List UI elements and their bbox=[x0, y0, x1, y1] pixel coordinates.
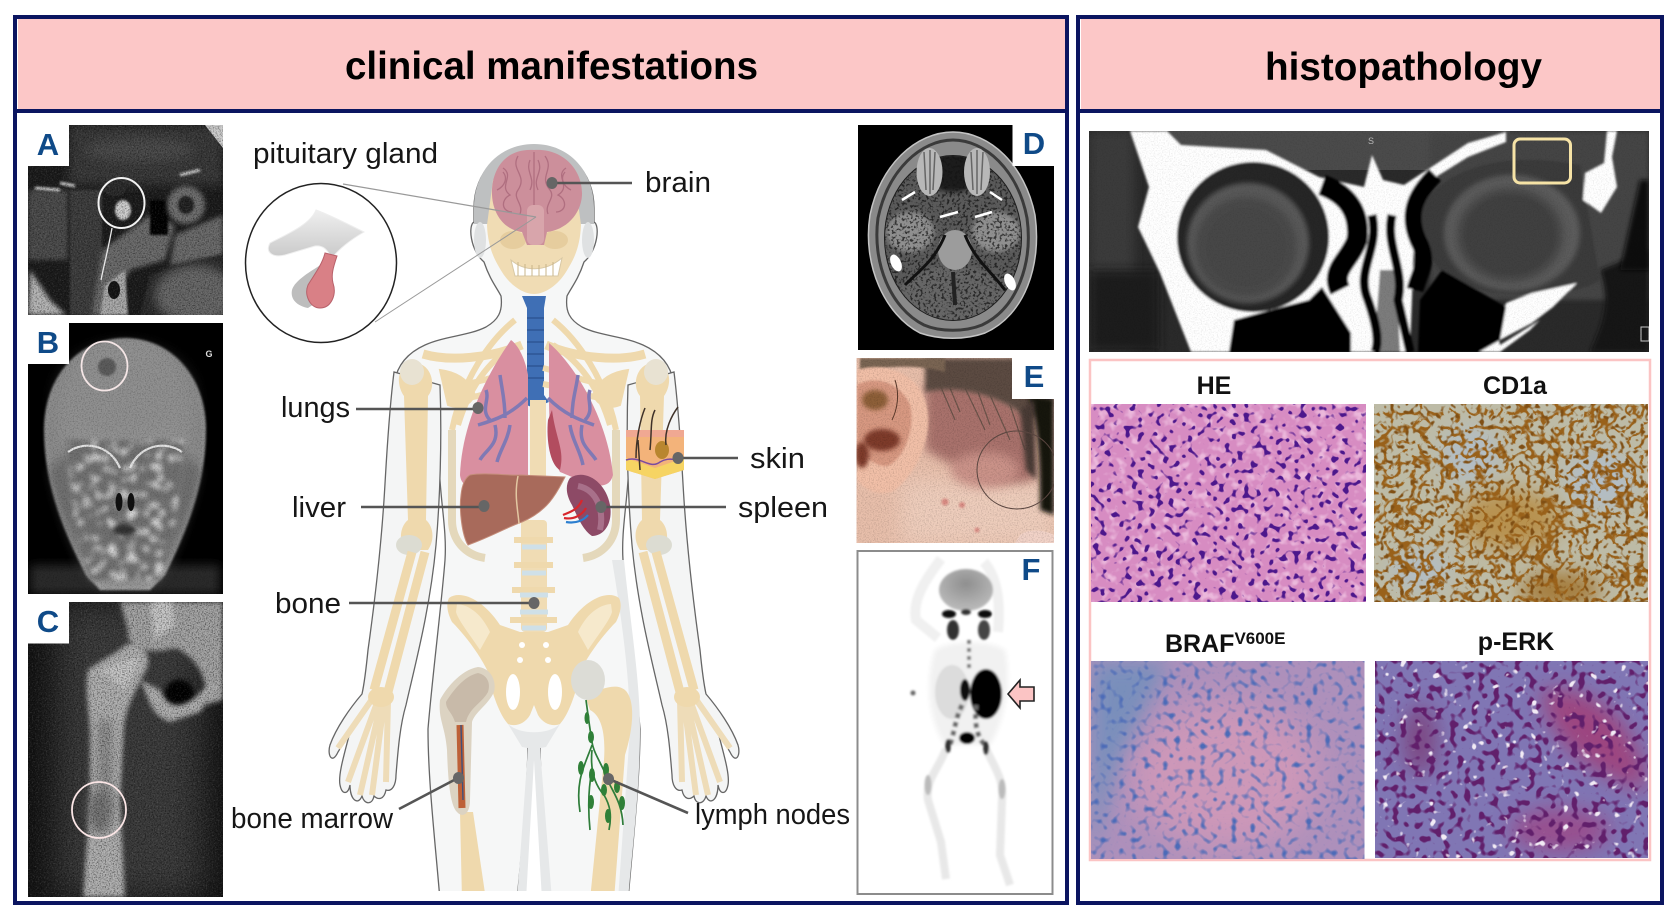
label: lungs: lungs bbox=[281, 392, 350, 424]
lesion box bbox=[1514, 139, 1570, 183]
bone: right femur bbox=[571, 660, 632, 900]
micrograph: HE bbox=[1091, 404, 1366, 602]
panel: histology stains bbox=[1090, 360, 1650, 860]
organ: lymph nodes and vessels bbox=[578, 700, 625, 830]
liver ligament bbox=[516, 476, 519, 524]
label D bbox=[1012, 125, 1054, 166]
CT scan of orbits with lesion box bbox=[1089, 131, 1649, 352]
label B bbox=[28, 323, 69, 364]
label: pituitary gland: pituitary gland bbox=[253, 138, 438, 170]
panel: histopathology bbox=[1078, 17, 1662, 903]
label: liver bbox=[292, 492, 490, 524]
image B: skull radiograph bbox=[28, 323, 223, 594]
micrograph: p-ERK bbox=[1375, 661, 1648, 858]
sinuses bbox=[1418, 270, 1506, 352]
soft shading on flanks and legs bbox=[508, 560, 640, 900]
arrow bbox=[1008, 680, 1034, 708]
label: liver: liver bbox=[292, 492, 346, 524]
scale marker: S bbox=[1368, 136, 1374, 146]
label: brain: brain bbox=[645, 167, 711, 199]
label: spleen bbox=[596, 492, 828, 524]
organ: lungs bbox=[460, 340, 613, 489]
label: lymph nodes bbox=[603, 773, 850, 831]
label E bbox=[1012, 358, 1054, 399]
label: bone marrow: bone marrow bbox=[231, 803, 394, 835]
bone: left femur with marrow bbox=[440, 667, 495, 900]
callout: pituitary gland magnified bbox=[246, 184, 536, 342]
image C: femur radiograph bbox=[28, 602, 223, 897]
arm and hand right bbox=[627, 359, 739, 803]
micrograph: CD1a bbox=[1374, 404, 1648, 602]
pituitary illustration bbox=[268, 210, 364, 308]
label A bbox=[28, 125, 69, 166]
label B: B bbox=[37, 325, 59, 360]
spine bbox=[510, 520, 557, 632]
neck vessels and trachea bbox=[522, 296, 549, 406]
heading: HE: HE bbox=[1197, 372, 1231, 400]
heading: BRAF V600E: V600E bbox=[1234, 629, 1285, 648]
micrograph: BRAF V600E bbox=[1091, 661, 1364, 859]
label C: C bbox=[37, 604, 59, 639]
bone bbox=[1130, 131, 1506, 352]
label A: A bbox=[37, 127, 59, 162]
header band: clinical manifestations bbox=[15, 19, 1067, 113]
organ: skin sample bbox=[626, 407, 684, 479]
image A: sagittal pituitary MRI bbox=[28, 125, 223, 315]
orbit left bbox=[1177, 162, 1329, 312]
bright bone right bbox=[1583, 131, 1617, 213]
body silhouette bbox=[394, 146, 674, 900]
ribs, scapula and clavicles bbox=[423, 320, 645, 558]
header band: histopathology: histopathology bbox=[1265, 46, 1542, 89]
figure: human body with skeleton and organs bbox=[329, 144, 739, 900]
panel: clinical manifestations bbox=[15, 17, 1067, 903]
heading: BRAF V600E: BRAF bbox=[1165, 630, 1234, 658]
organ: spleen bbox=[563, 475, 611, 536]
label: lymph nodes: lymph nodes bbox=[695, 799, 850, 831]
label: lungs bbox=[281, 392, 484, 424]
label: bone marrow bbox=[231, 772, 464, 835]
label: spleen: spleen bbox=[738, 492, 828, 524]
label C bbox=[28, 602, 69, 644]
label F: F bbox=[1022, 552, 1040, 587]
header band: clinical manifestations: clinical manifestations bbox=[345, 45, 758, 88]
header band: histopathology bbox=[1078, 19, 1662, 113]
label: skin: skin bbox=[750, 443, 805, 475]
label: bone bbox=[275, 588, 540, 620]
heading: CD1a: CD1a bbox=[1483, 372, 1548, 400]
image B: skull radiograph: G bbox=[205, 349, 213, 359]
heading: p-ERK: p-ERK bbox=[1478, 628, 1554, 656]
image F: whole-body PET scan bbox=[858, 551, 1052, 894]
label: bone: bone bbox=[275, 588, 341, 620]
label: brain bbox=[546, 167, 711, 199]
pelvis bbox=[447, 595, 534, 725]
arm and hand left bbox=[329, 359, 441, 803]
organ: brain bbox=[492, 150, 582, 245]
label: skin bbox=[672, 443, 805, 475]
image E: skin lesion behind ear bbox=[856, 358, 1054, 543]
label E: E bbox=[1024, 359, 1044, 394]
orbit right bbox=[1421, 160, 1600, 295]
image D: axial brain MRI bbox=[858, 125, 1054, 350]
label D: D bbox=[1023, 126, 1045, 161]
organ: liver bbox=[460, 474, 565, 545]
skull bbox=[474, 144, 594, 294]
pelvis mirrored bbox=[534, 595, 621, 725]
